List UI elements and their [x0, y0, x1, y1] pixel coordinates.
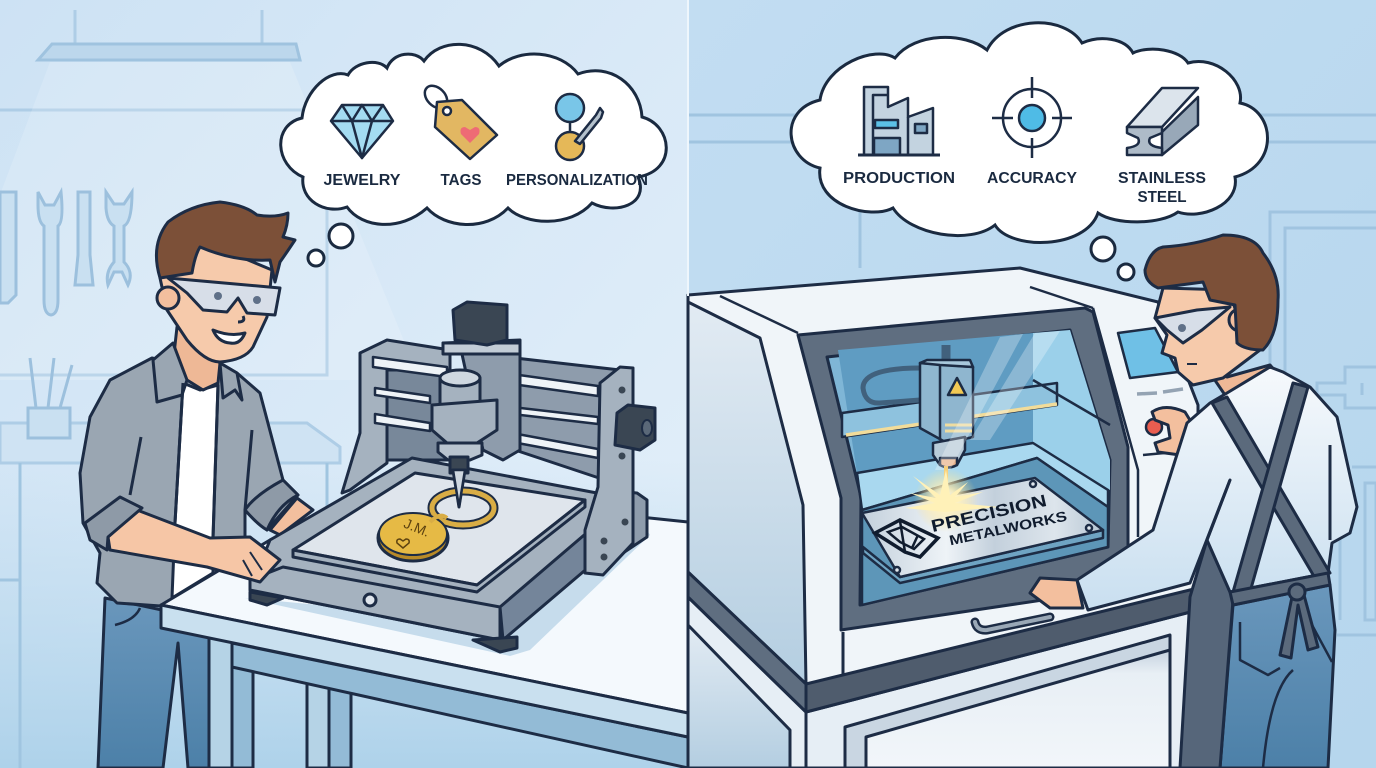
engraved gold tag and ring: J.M. [402, 515, 432, 540]
side motor [615, 405, 655, 450]
icon: tag [420, 81, 497, 159]
machine shadow [245, 518, 650, 656]
thought bubble: production applications [791, 23, 1268, 280]
back panel [600, 490, 647, 555]
neck [173, 327, 220, 390]
collars [153, 343, 187, 402]
icon: key and tag [556, 94, 603, 160]
panel lines [1093, 308, 1138, 537]
panel divider [687, 0, 689, 296]
hair [156, 202, 295, 282]
control panel [1118, 328, 1183, 455]
laser head [920, 363, 973, 443]
laser chamber interior [838, 330, 1110, 605]
label: tags: TAGS [440, 172, 482, 189]
goggles [1155, 307, 1230, 343]
goggles [168, 278, 280, 315]
dark band [688, 572, 806, 712]
panel: hobby workshop background [0, 0, 688, 768]
top surface [161, 470, 688, 713]
laser enclosure machine [688, 268, 1198, 768]
face [160, 240, 272, 362]
panel: production workshop background [688, 0, 1376, 768]
hair [1145, 235, 1278, 350]
engraved gold tag and ring [378, 470, 494, 561]
icon: diamond [331, 105, 393, 158]
apron straps [1212, 397, 1330, 578]
jeans [1220, 585, 1335, 768]
rods [373, 357, 598, 458]
face [1155, 288, 1260, 385]
jeans [98, 598, 210, 768]
spindle carriage [443, 340, 520, 460]
waist band [1230, 573, 1330, 605]
engraving spark [905, 466, 1000, 532]
label: accuracy: ACCURACY [987, 170, 1077, 187]
glass reflection [935, 331, 1060, 470]
window frame [798, 308, 1128, 630]
icon: target [992, 77, 1072, 158]
icon: factory [858, 87, 940, 155]
circle and feet [364, 594, 376, 606]
left side panel [688, 302, 806, 684]
left hand [1030, 578, 1083, 608]
label: stainless: STAINLESS [1118, 170, 1206, 187]
work plate [863, 530, 1103, 583]
cable loop [863, 368, 920, 403]
ear [157, 287, 179, 309]
button hand [1152, 408, 1193, 455]
shirt [1077, 367, 1357, 610]
engraved logo on plate: METALWORKS [948, 508, 1068, 548]
left forearm and hand [108, 510, 280, 582]
engraved logo on plate [875, 491, 1068, 557]
gantry right [585, 367, 633, 575]
label: jewelry: JEWELRY [324, 172, 401, 189]
ear [1229, 309, 1251, 331]
right forearm [270, 498, 313, 535]
door handle [975, 617, 1050, 630]
person: hobbyist head and front arm [85, 202, 295, 582]
label: personalization: PERSONALIZATION [506, 172, 648, 189]
neck [1208, 365, 1283, 395]
glass [827, 330, 1110, 605]
apron lower [1180, 540, 1233, 768]
mouth [213, 330, 245, 343]
front band [161, 605, 688, 737]
gantry right back plates [515, 358, 620, 485]
icon: steel beam [1127, 88, 1198, 155]
legs [209, 625, 232, 768]
base [688, 597, 1198, 768]
person: technician [1030, 235, 1357, 768]
label: production: PRODUCTION [843, 170, 955, 187]
t-shirt [172, 383, 218, 598]
CNC engraver machine [250, 302, 655, 652]
engraved logo on plate: PRECISION [929, 491, 1049, 536]
workbench table [161, 470, 688, 768]
spindle [440, 378, 480, 410]
bed plate [293, 473, 585, 585]
top motor [453, 302, 507, 345]
frame and base [250, 458, 597, 640]
shirt [80, 358, 298, 607]
thought bubble: hobby applications [281, 44, 666, 266]
gantry left [342, 340, 450, 493]
body [688, 268, 1198, 712]
label: steel: STEEL [1138, 189, 1187, 206]
person: hobbyist body [80, 358, 313, 768]
apron [232, 643, 688, 768]
